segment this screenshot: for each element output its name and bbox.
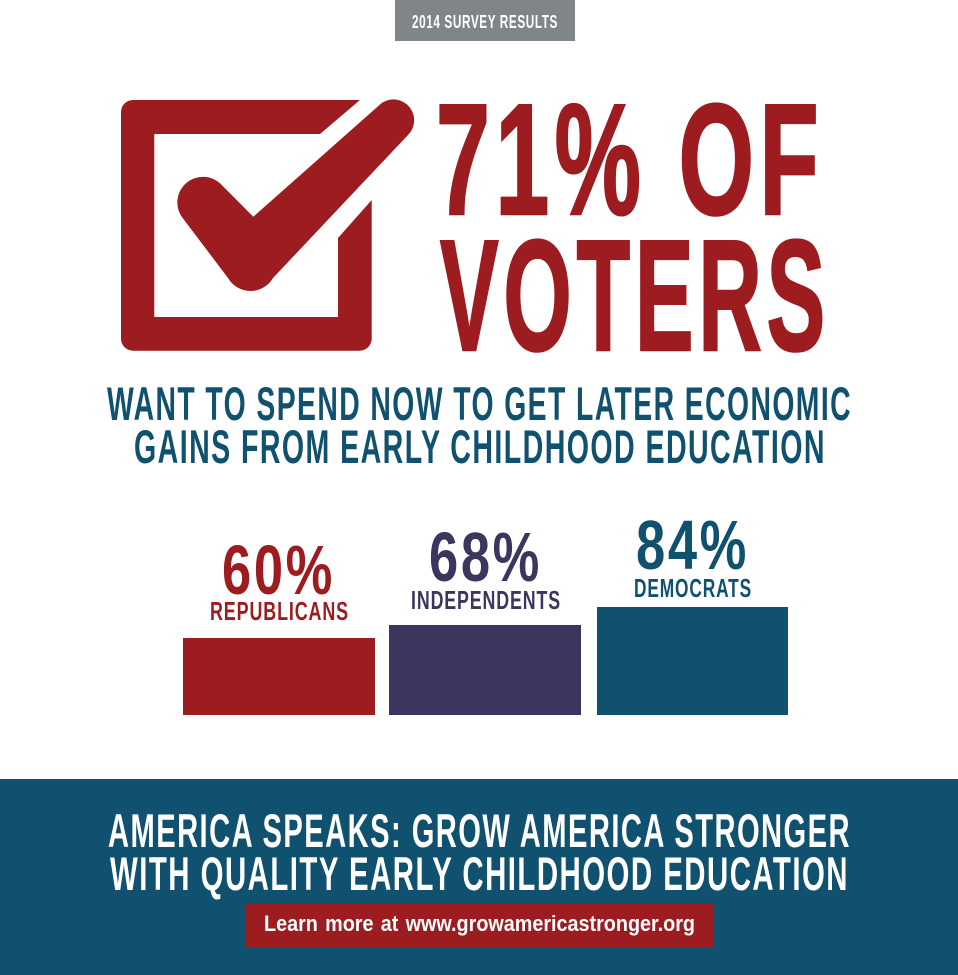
bar group: republicans 60% (183, 531, 375, 715)
bar group: democrats 84%: DEMOCRATS (634, 573, 752, 603)
footer heading (108, 804, 851, 900)
bar group: independents 68%: 68% (429, 518, 542, 596)
call to action button: Learn more at www.growamericastronger.org (264, 911, 695, 936)
bar group: republicans 60%: REPUBLICANS (210, 596, 349, 626)
bar chart: support by party (183, 506, 788, 715)
bar group: democrats 84%: 84% (636, 506, 749, 584)
subheading (107, 377, 852, 473)
call to action button (246, 904, 713, 948)
footer band (0, 779, 958, 975)
bar group: independents 68%: INDEPENDENTS (411, 585, 561, 615)
survey label tag (395, 0, 575, 41)
bar group: democrats 84% (597, 506, 788, 715)
headline: 71% of voters (436, 72, 830, 384)
bar group: independents 68% (389, 518, 581, 715)
survey label tag: 2014 SURVEY RESULTS (412, 12, 558, 32)
icon: checkbox with check mark (121, 99, 414, 351)
bar group: republicans 60%: 60% (222, 531, 335, 609)
